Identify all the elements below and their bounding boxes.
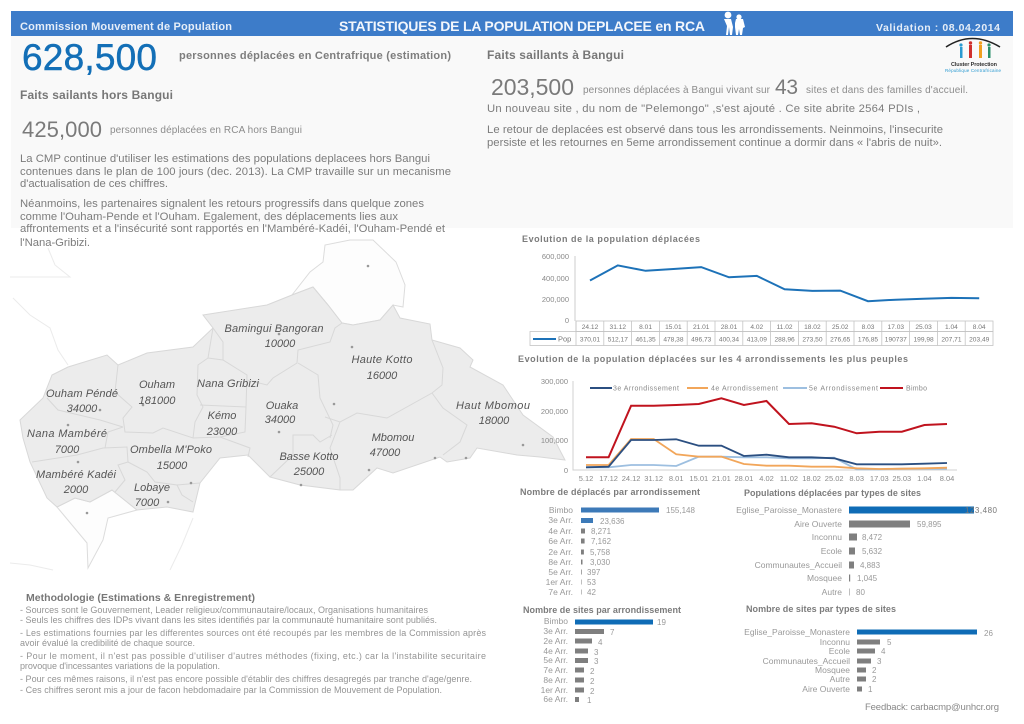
y axis labels: 0: [565, 316, 569, 325]
bar values: 19: [657, 618, 666, 627]
bar labels: 8e Arr.: [543, 675, 568, 685]
heading: outside Bangui: Faits sailants hors Bangui: [20, 88, 173, 102]
paragraph: returns: comme l'Ouham-Pende et l'Ouham. Egalement, des déplacements lies aux: [20, 211, 398, 223]
chart title: Nombre de sites par types de sites: [746, 604, 896, 614]
bar values: [868, 629, 993, 694]
map: prefecture labels: 2000: [63, 484, 89, 496]
methodology notes: provoque d'incessantes variations de la population.: [20, 661, 220, 671]
data table: 478,38: [663, 336, 684, 344]
panel: methodology: [20, 592, 486, 695]
bar labels: 4e Arr.: [548, 526, 573, 536]
bar values: 4: [881, 647, 886, 656]
bar labels: [541, 616, 568, 704]
bar values: 23,636: [600, 517, 625, 526]
data table: 207,71: [941, 336, 962, 344]
panel: facts in Bangui: [487, 48, 968, 149]
map: prefecture labels: 7000: [55, 444, 80, 456]
data table: 8.03: [862, 324, 875, 331]
bar values: 59,895: [917, 520, 942, 529]
bar labels: 2e Arr.: [543, 636, 568, 646]
header banner: STATISTIQUES DE LA POPULATION DEPLACEE en RCA: [339, 18, 705, 34]
feedback contact: Feedback: carbacmp@unhcr.org: [865, 702, 999, 713]
bar values: 1: [868, 685, 873, 694]
bar values: 3: [594, 657, 599, 666]
bar labels: Mosquee: [815, 665, 850, 675]
x axis labels: 8.03: [849, 474, 864, 483]
bar values: 2: [872, 675, 877, 684]
bar values: 4: [598, 638, 603, 647]
bar labels: Autre: [822, 587, 842, 597]
bar labels: 5e Arr.: [548, 567, 573, 577]
x axis labels: 8.04: [940, 474, 954, 483]
methodology notes: - Sources sont le Gouvernement, Leader religieux/communautaire/locaux, Organisations humanitaires: [20, 605, 428, 615]
methodology notes: [20, 605, 486, 695]
x axis labels: 28.01: [735, 474, 753, 483]
bar labels: 3e Arr.: [548, 515, 573, 525]
map: prefecture labels: 18000: [479, 415, 510, 427]
y axis labels: 400,000: [542, 274, 569, 283]
y axis labels: 0: [564, 466, 568, 475]
panel: facts in Bangui: sites et dans des familles d'accueil.: [806, 85, 968, 96]
map: prefecture labels: [27, 323, 530, 509]
paragraph: estimates: [20, 153, 451, 190]
bar labels: [546, 505, 573, 597]
map: town dots: [67, 265, 524, 514]
map: prefecture labels: Ouham Péndé: [46, 388, 118, 400]
data table: 370,01: [580, 336, 600, 344]
bar chart: sites by arrondissement: [523, 605, 681, 705]
paragraph: returns: Néanmoins, les partenaires signalent les retours progressifs dans quelque zones: [20, 198, 424, 210]
logo: cluster protection: [945, 38, 1001, 73]
map: prefecture labels: 181000: [139, 395, 176, 407]
icon: displaced family: [724, 12, 745, 35]
data table: 413,09: [747, 336, 767, 344]
paragraph: estimates: La CMP continue d'utiliser les estimations des populations deplacees hors Bangui: [20, 153, 430, 165]
bar labels: 1er Arr.: [546, 577, 573, 587]
bar values: 26: [984, 629, 993, 638]
data table: 8.04: [973, 324, 986, 331]
bars: [575, 620, 653, 702]
paragraph: returns: affrontements et a l'insécurité sont rapportés en l'Mambéré-Kadéi, l'Ouham-Pendé et: [20, 223, 446, 235]
x axis labels: 24.12: [622, 474, 640, 483]
bar labels: Bimbo: [544, 616, 568, 626]
x axis labels: 25.02: [825, 474, 844, 483]
line: 3e arrondissement: [586, 439, 947, 467]
header banner: Validation : 08.04.2014: [876, 22, 1000, 34]
x axis labels: 25.03: [892, 474, 911, 483]
bar values: [587, 506, 695, 597]
y axis labels: [542, 252, 569, 325]
bars: [581, 508, 659, 594]
number: outside Bangui: 425,000: [22, 117, 102, 142]
chart: population of the 4 most populated arrondissements: [518, 354, 957, 483]
x axis labels: 11.02: [780, 474, 798, 483]
heading: Bangui: Faits saillants à Bangui: [487, 48, 624, 62]
panel: headline and facts outside Bangui: [20, 37, 451, 249]
bar values: 1,045: [857, 574, 878, 583]
bar labels: Eglise_Paroisse_Monastere: [736, 505, 842, 515]
bar values: 2: [590, 687, 595, 696]
data table: 28.01: [721, 324, 738, 331]
bar labels: 5e Arr.: [543, 655, 568, 665]
data table: 17.03: [888, 324, 904, 331]
text: new site and returns: Un nouveau site , du nom de "Pelemongo" ,s'est ajouté . Ce site abrite 2564 PDIs ,: [487, 103, 920, 115]
bar values: 2: [590, 667, 595, 676]
chart title: Nombre de sites par arrondissement: [523, 605, 681, 615]
data table: 190737: [885, 336, 907, 344]
map: white prefectures: [57, 240, 405, 568]
y axis labels: 600,000: [542, 252, 569, 261]
bar values: 123,480: [965, 506, 998, 515]
data table: 8.01: [639, 324, 652, 331]
y axis labels: 300,000: [541, 377, 568, 386]
map: prefecture labels: Bamingui Bangoran: [224, 323, 324, 335]
bar values: 80: [856, 588, 865, 597]
data table: 11.02: [777, 324, 793, 331]
data table: 199,98: [914, 336, 934, 344]
bar values: 5: [887, 638, 892, 647]
bar labels: 2e Arr.: [548, 547, 573, 557]
bar labels: Autre: [830, 674, 850, 684]
big total number: 628,500: [22, 37, 157, 78]
methodology notes: - Les estimations fournies par les differentes sources ont été recoupés par les membres de la Commission après: [20, 628, 486, 638]
bar labels: [744, 627, 850, 694]
bar labels: Ecole: [829, 646, 850, 656]
methodology notes: - Pour le moment, il n'est pas possible d'utiliser d'autres méthodes (fixing, etc.) car la l'instabilite securitaire: [20, 651, 486, 661]
bar labels: Communautes_Accueil: [755, 560, 842, 570]
x axis labels: 5.12: [579, 474, 593, 483]
data table: 4.02: [750, 324, 764, 331]
data table: 176,85: [858, 336, 878, 344]
line: 5e arrondissement: [586, 457, 947, 469]
chart title: Nombre de déplacés par arrondissement: [520, 487, 700, 497]
data table: 31.12: [610, 324, 626, 331]
bar labels: 7e Arr.: [548, 587, 573, 597]
data table: 21.01: [693, 324, 710, 331]
map: prefecture labels: Haut Mbomou: [456, 400, 530, 412]
map: Central African Republic prefectures: [10, 240, 565, 570]
y axis labels: 200,000: [542, 295, 569, 304]
legend: 5e Arrondissement: [809, 386, 878, 392]
bar labels: 3e Arr.: [543, 626, 568, 636]
map: prefecture labels: Basse Kotto: [280, 451, 338, 463]
x axis labels: [579, 474, 954, 483]
y axis labels: [541, 377, 568, 475]
bar labels: 8e Arr.: [548, 557, 573, 567]
data table: 24.12: [582, 324, 599, 331]
bar values: 155,148: [666, 506, 695, 515]
map: prefecture labels: Ouham: [139, 379, 175, 391]
data table: 496,73: [691, 336, 712, 344]
methodology notes: avoir évalué la credibilité de chaque source.: [20, 638, 195, 648]
line: Bimbo: [586, 398, 947, 457]
map: prefecture labels: 23000: [206, 426, 238, 438]
panel: headline and facts outside Bangui: personnes déplacées en Centrafrique (estimation): [179, 50, 451, 62]
map: prefecture labels: 16000: [367, 370, 398, 382]
bar values: 397: [587, 568, 601, 577]
bar values: 3: [877, 657, 882, 666]
methodology notes: - Seuls les chiffres des IDPs vivant dans les sites identifiés par la communauté humanitaire sont publiés.: [20, 615, 437, 625]
map: prefecture labels: 34000: [265, 414, 296, 426]
legend: 4e Arrondissement: [711, 386, 778, 392]
x axis labels: 18.02: [802, 474, 821, 483]
bar values: 8,271: [591, 527, 612, 536]
bar labels: [736, 505, 842, 597]
bar values: 1: [587, 696, 592, 705]
number: sites: 43: [775, 76, 798, 99]
logo: cluster protection: Cluster Protection: [951, 62, 998, 68]
bar values: 3,030: [590, 558, 611, 567]
bar values: 2: [590, 677, 595, 686]
map: prefecture labels: Haute Kotto: [352, 354, 412, 366]
bar labels: Mosquee: [807, 573, 842, 583]
data table: [530, 321, 993, 346]
map: prefecture labels: Kémo: [208, 410, 236, 422]
bar labels: 1er Arr.: [541, 685, 568, 695]
line: 4e arrondissement: [586, 439, 947, 469]
map: prefecture labels: Mambéré Kadéi: [36, 469, 117, 481]
map: prefecture labels: Mbomou: [372, 432, 414, 444]
map: prefecture labels: 47000: [370, 447, 401, 459]
bars: [857, 630, 977, 692]
map: prefecture labels: Lobaye: [134, 482, 170, 494]
population line: [590, 265, 979, 301]
paragraph: estimates: contenues dans le plan de 100 jours (dec. 2013). La CMP travaille sur un mecanisme: [20, 166, 451, 178]
y axis labels: 100,000: [541, 436, 568, 445]
map: grey prefectures: [20, 287, 565, 512]
bar values: 5,632: [862, 547, 883, 556]
bar chart: displaced by arrondissement: [520, 487, 700, 597]
data table: 288,96: [775, 336, 795, 344]
map: prefecture labels: Ouaka: [266, 400, 298, 412]
bar values: 2: [872, 666, 877, 675]
bar values: 42: [587, 588, 596, 597]
x axis labels: 8.01: [669, 474, 684, 483]
methodology notes: - Pour ces mêmes raisons, il n'est pas encore possible d'établir des chiffres desagregés par tranche d'age/genre.: [20, 674, 472, 684]
bar values: 53: [587, 578, 596, 587]
x axis labels: 17.03: [870, 474, 889, 483]
logo: cluster protection: République Centrafricaine: [945, 68, 1001, 73]
header banner: [11, 11, 1013, 36]
data table: 400,34: [719, 336, 739, 344]
bar labels: Inconnu: [812, 532, 842, 542]
chart title: Evolution de la population déplacées sur les 4 arrondissements les plus peuples: [518, 354, 908, 364]
bar labels: Inconnu: [820, 637, 850, 647]
data table: 203,49: [969, 336, 990, 344]
x axis labels: 15.01: [689, 474, 708, 483]
bar values: 8,472: [862, 533, 883, 542]
legend: [590, 386, 927, 392]
map: prefecture labels: 15000: [157, 460, 188, 472]
map outside borders: [10, 248, 193, 570]
y axis labels: 200,000: [541, 407, 568, 416]
bar labels: Aire Ouverte: [794, 519, 842, 529]
bar labels: 6e Arr.: [548, 536, 573, 546]
map: prefecture labels: Nana Gribizi: [197, 378, 260, 390]
data table: 1.04: [945, 324, 958, 331]
data table: 273,50: [802, 336, 823, 344]
bar values: 5,758: [590, 548, 611, 557]
x axis labels: 31.12: [644, 474, 663, 483]
data table: 276,65: [830, 336, 851, 344]
x axis labels: 21.01: [712, 474, 731, 483]
x axis labels: 1.04: [917, 474, 932, 483]
bar values: [856, 506, 998, 597]
text: new site and returns: [487, 103, 943, 149]
chart title: Evolution de la population déplacées: [522, 234, 700, 244]
bar values: 4,883: [860, 561, 881, 570]
legend: 3e Arrondissement: [613, 386, 679, 392]
paragraph: estimates: d'actualisation de ces chiffres.: [20, 178, 168, 190]
methodology notes: - Ces chiffres seront mis a jour de facon hebdomadaire par la Commission de Mouvement de Population.: [20, 685, 442, 695]
bar labels: Bimbo: [549, 505, 573, 515]
number: Bangui: 203,500: [491, 74, 574, 100]
bar chart: sites by site type: [744, 604, 993, 694]
panel: headline and facts outside Bangui: personnes déplacées en RCA hors Bangui: [110, 125, 302, 136]
heading: methodology: Methodologie (Estimations & Enregistrement): [26, 592, 255, 604]
map: prefecture borders: [32, 323, 467, 502]
bar values: [587, 618, 666, 705]
map: prefecture labels: 10000: [265, 338, 296, 350]
data table: 512,17: [608, 336, 628, 344]
bar labels: Aire Ouverte: [802, 684, 850, 694]
legend: Bimbo: [906, 386, 927, 392]
bar labels: 4e Arr.: [543, 646, 568, 656]
map: prefecture labels: 34000: [67, 403, 98, 415]
x axis labels: 17.12: [599, 474, 618, 483]
chart: total displaced population line with data table: [522, 234, 993, 346]
map: prefecture labels: 7000: [135, 497, 160, 509]
bar labels: 7e Arr.: [543, 665, 568, 675]
paragraph: returns: l'Nana-Gribizi.: [20, 237, 90, 249]
x axis labels: 4.02: [759, 474, 774, 483]
header banner: Commission Mouvement de Population: [20, 21, 232, 33]
data table: 25.02: [832, 324, 849, 331]
bar labels: Communautes_Accueil: [763, 656, 850, 666]
paragraph: returns: [20, 198, 446, 249]
data table: 18.02: [804, 324, 821, 331]
chart title: Populations déplacées par types de sites: [744, 488, 921, 498]
bar values: 3: [594, 648, 599, 657]
bar chart: displaced by site type: [736, 488, 998, 597]
bar values: 7: [610, 628, 615, 637]
data table: 25.03: [915, 324, 932, 331]
map: prefecture labels: Nana Mambéré: [27, 428, 107, 440]
panel: facts in Bangui: personnes déplacées à Bangui vivant sur: [583, 85, 771, 96]
bar labels: Ecole: [821, 546, 842, 556]
bar labels: 6e Arr.: [543, 694, 568, 704]
bars: [849, 506, 974, 596]
bar labels: Eglise_Paroisse_Monastere: [744, 627, 850, 637]
text: new site and returns: persiste et les retournes en 5eme arrondissement continue a dormir dans « l'abris de nuit».: [487, 137, 942, 149]
data table: 15.01: [665, 324, 682, 331]
data table: 461,35: [636, 336, 656, 344]
map: prefecture labels: Ombella M'Poko: [130, 444, 212, 456]
bar values: 7,162: [591, 537, 612, 546]
map: prefecture labels: 25000: [293, 466, 325, 478]
data table: Pop: [558, 334, 571, 344]
text: new site and returns: Le retour de deplacées est observé dans tous les arrondissements. Neinmoins, l'insecurite: [487, 124, 943, 136]
